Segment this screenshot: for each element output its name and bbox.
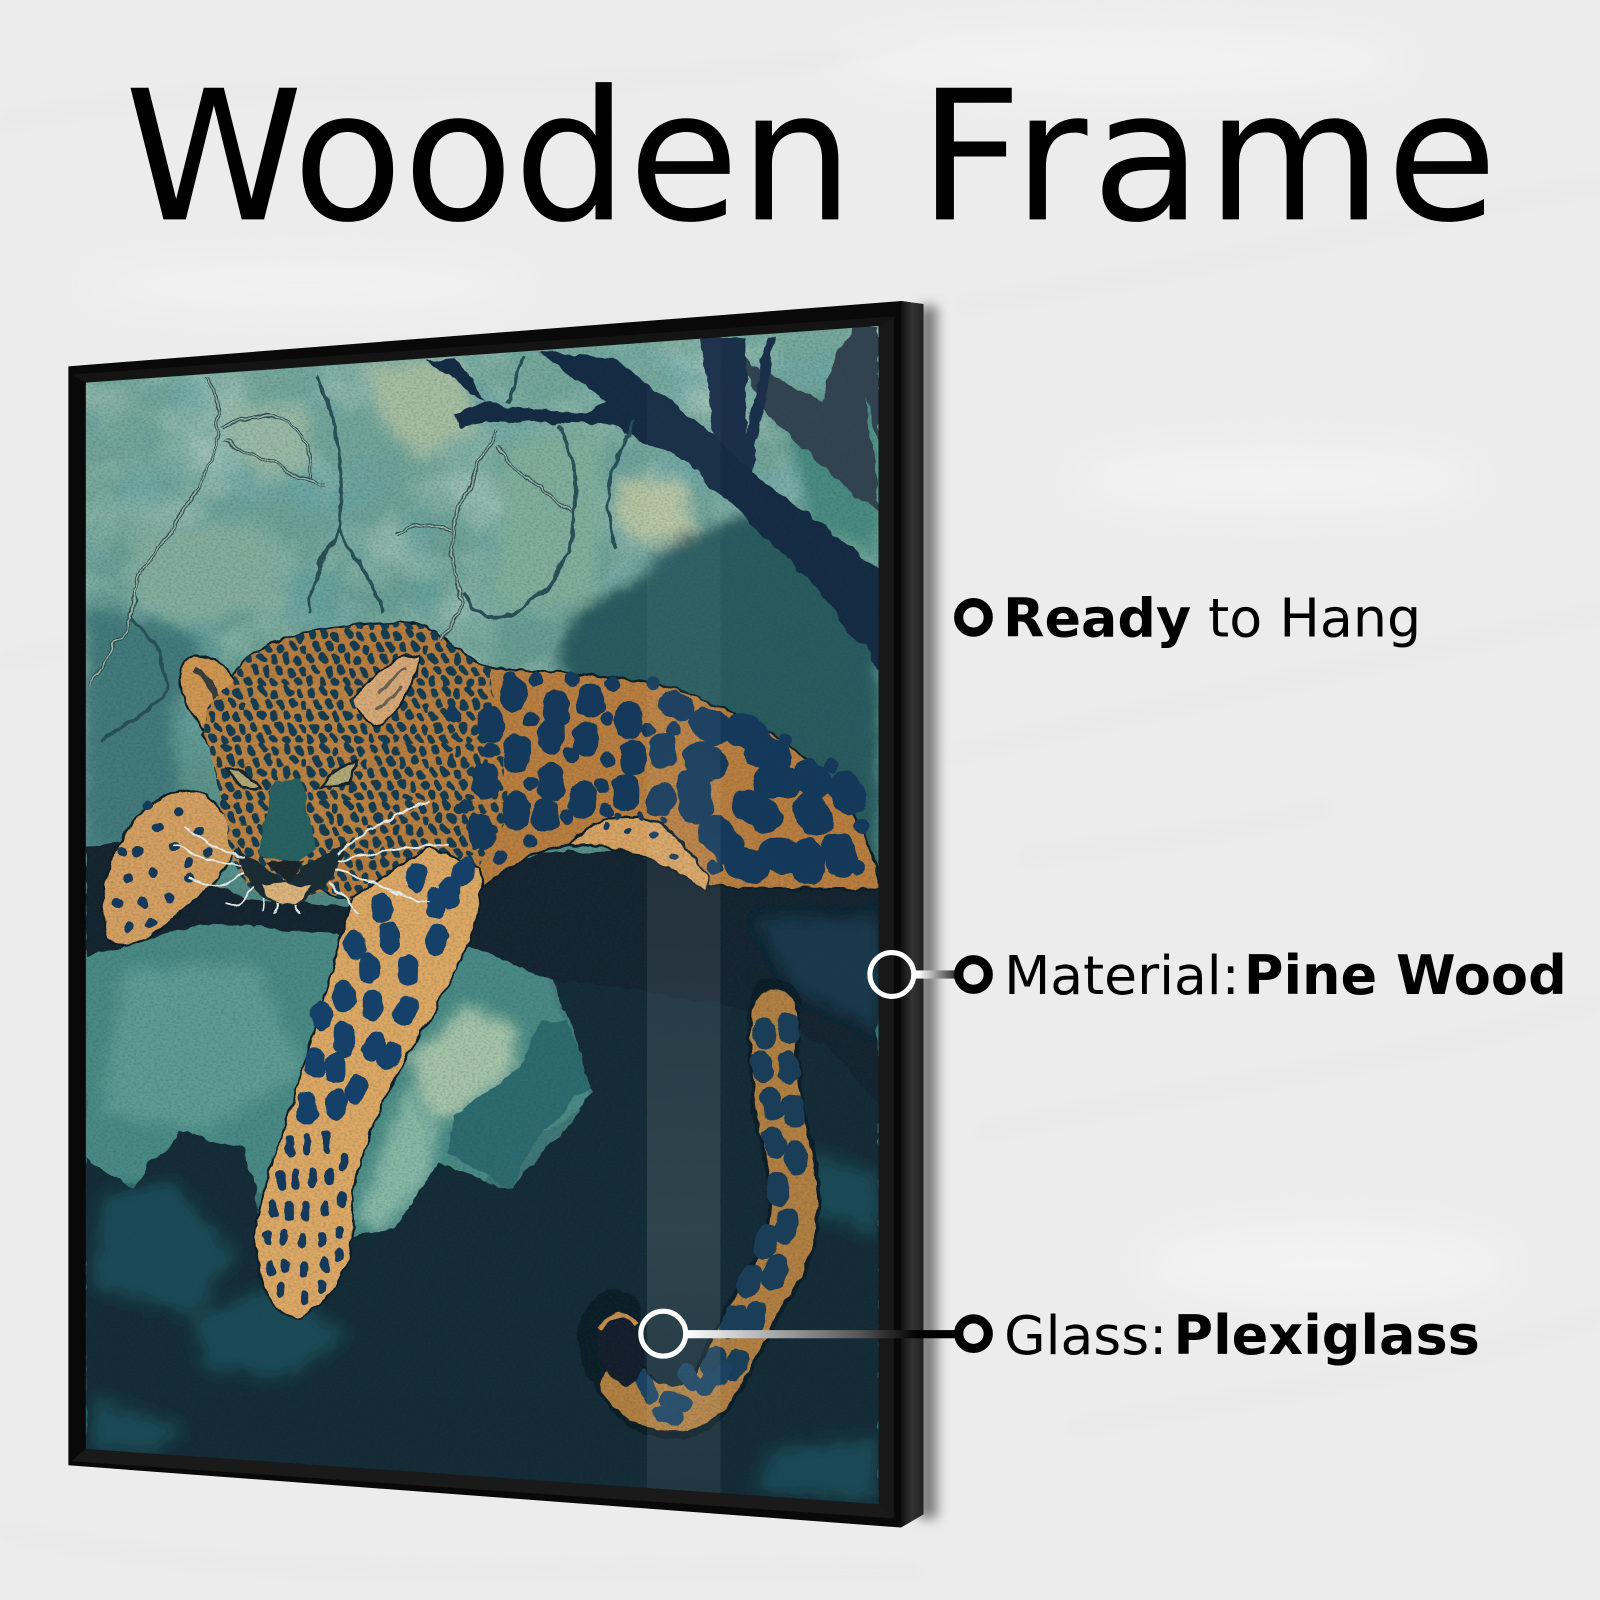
nose bridge bbox=[257, 778, 316, 862]
foliage mottling bbox=[71, 306, 898, 878]
right ear bbox=[352, 655, 418, 727]
painting bbox=[71, 306, 898, 1531]
thick tree limb bbox=[86, 842, 880, 1107]
tail tip bbox=[597, 1317, 645, 1388]
callout: glass: Glass: bbox=[1004, 1304, 1167, 1367]
torso bbox=[204, 622, 880, 918]
whiskers bbox=[173, 801, 449, 913]
front leg bbox=[255, 847, 482, 1318]
callout: ready to hang: Ready to Hang bbox=[1003, 587, 1421, 650]
face bbox=[204, 676, 378, 904]
vines bbox=[89, 353, 634, 739]
title: Wooden bbox=[124, 51, 854, 262]
framed artwork bbox=[68, 301, 923, 1531]
left ear bbox=[179, 656, 237, 740]
canvas sky base bbox=[71, 306, 898, 1531]
canvas texture bbox=[86, 306, 882, 1531]
leopard bbox=[102, 622, 880, 1417]
shoulder rosettes bbox=[454, 679, 682, 857]
haunch rosettes bbox=[673, 723, 862, 869]
lower teal clouds bbox=[86, 950, 590, 1237]
dark lower forest bbox=[86, 980, 880, 1510]
callout: material bbox=[870, 944, 1567, 1007]
frame outer profile bbox=[68, 301, 923, 1528]
nose bbox=[267, 860, 304, 884]
head bbox=[173, 655, 449, 913]
callout: glass: Plexiglass bbox=[1173, 1304, 1480, 1367]
callout: material: Pine Wood bbox=[1244, 944, 1567, 1007]
tail bbox=[604, 1005, 797, 1417]
frame shadow on wall bbox=[918, 306, 937, 1518]
muzzle bbox=[237, 842, 347, 904]
left paw bbox=[102, 791, 235, 945]
glass glare strip bbox=[647, 327, 720, 1531]
title: Frame bbox=[918, 51, 1502, 262]
foliage patches bbox=[86, 359, 880, 890]
eyes bbox=[227, 760, 357, 788]
callout: glass bbox=[641, 1304, 1480, 1367]
callout: material: Material: bbox=[1004, 944, 1240, 1007]
tree branches bbox=[424, 328, 880, 670]
foreleg over limb bbox=[569, 817, 709, 890]
